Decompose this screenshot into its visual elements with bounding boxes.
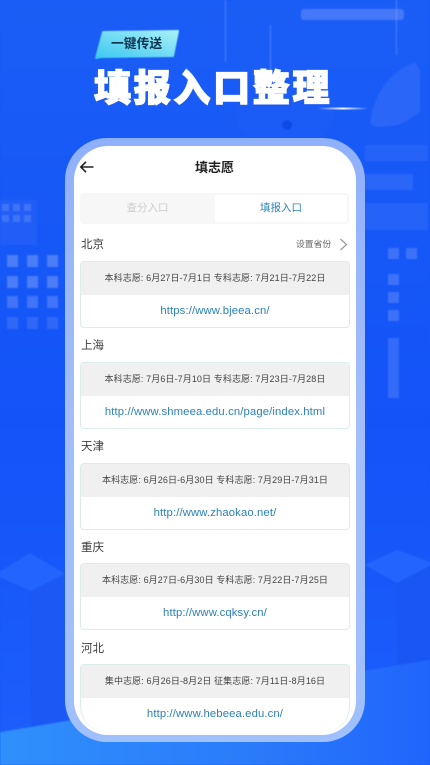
tab: 填报入口: 填报入口 [260,202,302,214]
dates [81,262,349,295]
link: http://www.zhaokao.net/ [154,507,276,519]
dates: 集中志愿: 6月26日-8月2日 征集志愿: 7月11日-8月16日 [105,676,325,686]
card: 北京 [80,261,350,328]
card: 天津 [80,463,350,530]
card: 重庆 [80,563,350,630]
tag: 一键传送 [94,29,180,60]
dates [81,363,349,396]
page heading: 填志愿 [195,160,234,175]
set province text: 设置省份 [296,239,331,249]
icon: back arrow [80,161,94,173]
card: 上海 [80,362,350,429]
link: http://www.hebeea.edu.cn/ [147,708,283,720]
province heading: 上海: 上海 [81,340,104,352]
dates: 本科志愿: 6月27日-7月1日 专科志愿: 7月21日-7月22日 [105,273,325,283]
dates: 本科志愿: 6月26日-6月30日 专科志愿: 7月29日-7月31日 [102,475,328,485]
link: https://www.bjeea.cn/ [160,305,270,317]
province heading: 北京: 北京 [81,239,104,251]
tab: 查分入口: 查分入口 [126,202,168,214]
tag text: 一键传送 [111,36,162,51]
title: 填报入口整理 [94,68,332,109]
dates: 本科志愿: 7月6日-7月10日 专科志愿: 7月23日-7月28日 [105,374,325,384]
tab: 填报入口 [215,195,347,222]
dates [81,665,349,698]
tab bar [80,193,349,224]
link: http://www.cqksy.cn/ [163,607,267,619]
set province link [296,238,348,250]
dates [81,564,349,597]
phone screen [74,146,356,735]
card: 河北 [80,664,350,732]
province heading: 河北: 河北 [81,643,104,655]
link: http://www.shmeea.edu.cn/page/index.html [105,406,325,418]
dates: 本科志愿: 6月27日-6月30日 专科志愿: 7月22日-7月25日 [102,575,328,585]
dates [81,464,349,497]
icon: chevron [340,238,348,250]
title underline glow [319,108,367,110]
phone frame [65,138,365,742]
province heading: 天津: 天津 [81,441,104,453]
province heading: 重庆: 重庆 [81,542,104,554]
